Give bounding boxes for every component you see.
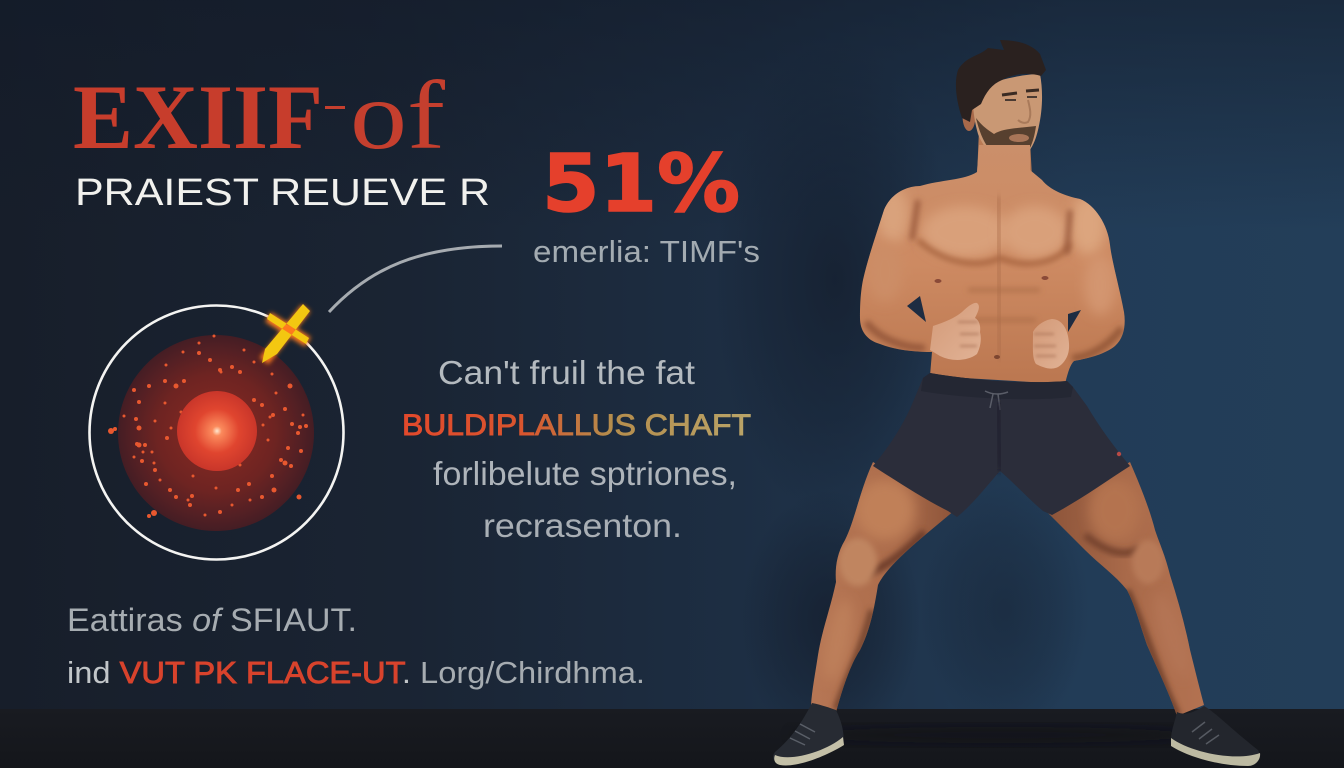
beard <box>976 118 1036 161</box>
glowing core <box>177 391 257 471</box>
right fist <box>1033 319 1069 369</box>
logo <box>1117 452 1121 456</box>
footer copy <box>67 602 645 690</box>
face <box>973 74 1042 161</box>
centre seam shading <box>998 402 1000 471</box>
nose <box>1018 100 1030 123</box>
statistic: 51%: 51% <box>542 138 740 230</box>
mouth area <box>1009 134 1029 142</box>
body highlighted line: BULDIPLALLUS CHAFT <box>402 409 751 442</box>
left shoe <box>773 703 844 765</box>
eyes <box>1005 97 1037 100</box>
floor <box>0 709 1344 768</box>
outer ring <box>90 306 344 560</box>
wall shadow behind figure <box>715 40 1090 750</box>
callout line <box>329 246 502 312</box>
torso base <box>860 145 1125 384</box>
figure: athlete <box>773 40 1260 766</box>
ear <box>962 101 976 131</box>
right shoe <box>1171 706 1260 766</box>
hair <box>956 40 1046 122</box>
muscle shading <box>866 187 1122 360</box>
footer line 1: Eattiras of SFIAUT. <box>67 602 357 638</box>
title <box>73 62 445 170</box>
left fist <box>930 303 981 360</box>
brows <box>1002 90 1039 95</box>
left leg <box>811 462 952 711</box>
fat sphere <box>118 335 314 531</box>
footer line 2: ind VUT PK FLACE-UT . Lorg/Chirdhma. <box>67 655 645 690</box>
right fist creases <box>1034 334 1056 356</box>
armpit gaps <box>907 296 1081 332</box>
body line 3: forlibelute sptriones, <box>433 455 737 492</box>
waistband <box>921 373 1073 399</box>
left fist creases <box>958 322 979 346</box>
drawstring <box>985 391 1008 410</box>
neck <box>950 130 1050 215</box>
title word: EXIIF <box>73 66 323 168</box>
body copy <box>402 354 751 544</box>
title connecting word: of <box>350 62 445 170</box>
floor shadow <box>790 727 1210 743</box>
title dash <box>325 106 345 109</box>
subtitle: PRAIEST REUEVE R <box>75 172 490 214</box>
shorts <box>873 373 1130 517</box>
right leg <box>1048 462 1204 714</box>
neck and head <box>950 40 1050 215</box>
particles <box>108 334 308 518</box>
statistic caption: emerlia: TIMF's <box>533 234 760 269</box>
icon: yellow cross marker <box>262 304 310 363</box>
body line 4: recrasenton. <box>483 507 682 544</box>
target diagram <box>90 304 344 560</box>
body line 1: Can't fruil the fat <box>438 354 695 391</box>
torso and arms <box>860 145 1125 384</box>
